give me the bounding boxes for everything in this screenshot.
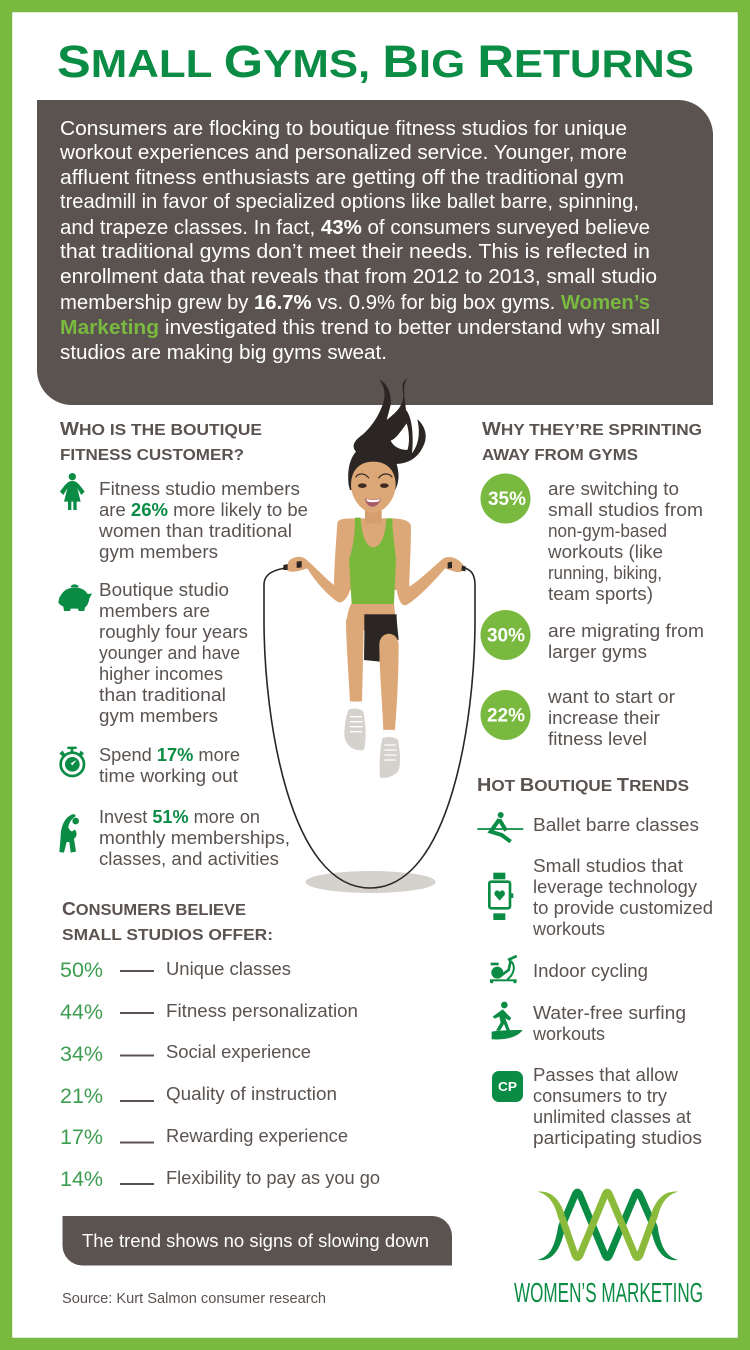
- trend: indoor cycling: [490, 956, 648, 983]
- hips: [347, 603, 397, 630]
- rope handles: [283, 561, 466, 571]
- banner: trend callout: The trend shows no signs of slowing down: [82, 1230, 429, 1251]
- heading: why they're sprinting away from gyms: [482, 419, 702, 464]
- trend: indoor cycling: Indoor cycling: [533, 960, 648, 981]
- stat: 22 percent: increase their: [548, 707, 660, 728]
- icon: smart watch: [489, 873, 513, 920]
- trend: class passes: [492, 1064, 702, 1148]
- trend: water-free surfing: workouts: [532, 1023, 605, 1044]
- list: what small studios offer: Fitness personalization: [166, 1000, 358, 1021]
- right leg: [379, 634, 399, 730]
- customer item: younger, higher incomes: Boutique studio: [99, 579, 229, 600]
- list: what small studios offer: 17%: [60, 1126, 103, 1149]
- panel: introduction: workout experiences and personalized service. Younger, more: [59, 142, 627, 164]
- icon: CP badge: [492, 1071, 523, 1102]
- icon: piggy bank: [58, 584, 92, 611]
- customer item: time working out: Spend 17% more: [99, 744, 240, 765]
- eyes and brows: [356, 474, 392, 478]
- icon: exercise bike: [490, 956, 517, 983]
- trend: water-free surfing: [492, 1002, 686, 1044]
- icon: ballet barre: [477, 812, 523, 842]
- trend: technology: leverage technology: [533, 876, 698, 897]
- customer item: invest more: monthly memberships,: [99, 827, 290, 848]
- icon: woman: [60, 473, 85, 510]
- icon: surfer: [492, 1002, 523, 1039]
- trend: technology: [489, 855, 713, 939]
- panel: introduction: Marketing investigated this trend to better understand why small: [60, 317, 660, 339]
- stat: 30 percent: larger gyms: [548, 641, 647, 662]
- panel: introduction: that traditional gyms don’t meet their needs. This is reflected in: [60, 241, 650, 263]
- stat: 22 percent: want to start or: [547, 686, 675, 707]
- customer item: younger, higher incomes: higher incomes: [99, 663, 223, 684]
- panel: introduction: affluent fitness enthusiasts are getting off the traditional gym: [60, 167, 624, 189]
- stat: 22 percent: fitness level: [548, 728, 647, 749]
- stat: 30 percent: are migrating from: [548, 620, 704, 641]
- stat: 35 percent: team sports): [548, 583, 653, 604]
- list: what small studios offer: Social experience: [166, 1041, 311, 1062]
- shadow: [306, 871, 436, 893]
- list: what small studios offer: 50%: [60, 959, 103, 982]
- heading: who is the boutique fitness customer: FITNESS CUSTOMER?: [60, 447, 244, 464]
- heading: who is the boutique fitness customer: WHO IS THE BOUTIQUE: [60, 419, 262, 439]
- icon: stretching person: [59, 814, 79, 853]
- list: what small studios offer: Flexibility to pay as you go: [166, 1167, 380, 1188]
- customer item: women: women than traditional: [98, 520, 292, 541]
- heading: consumers believe small studios offer: [62, 899, 273, 944]
- trend: water-free surfing: Water-free surfing: [533, 1002, 686, 1023]
- trend: technology: Small studios that: [533, 855, 683, 876]
- panel: introduction: Consumers are flocking to boutique fitness studios for unique: [60, 118, 627, 140]
- stat: 35 percent: [480, 474, 703, 604]
- hair: [348, 378, 426, 490]
- heading: consumers believe small studios offer: CONSUMERS BELIEVE: [62, 899, 246, 919]
- customer item: women: [60, 473, 308, 562]
- customer item: women: are 26% more likely to be: [99, 499, 308, 520]
- stat: 35 percent: are switching to: [548, 478, 679, 499]
- panel: introduction: and trapeze classes. In fact, 43% of consumers surveyed believe: [60, 217, 650, 239]
- trend: class passes: consumers to try: [533, 1085, 668, 1106]
- banner: trend callout: [62, 1216, 452, 1266]
- list: what small studios offer: 14%: [60, 1168, 103, 1191]
- right sock and shoe: [383, 730, 396, 740]
- customer item: younger, higher incomes: roughly four years: [99, 621, 248, 642]
- customer item: younger, higher incomes: members are: [99, 600, 210, 621]
- heading: why they're sprinting away from gyms: WHY THEY’RE SPRINTING: [482, 419, 702, 439]
- icon: CP badge: CP: [498, 1079, 517, 1094]
- neck: [365, 503, 382, 523]
- left leg: [346, 619, 364, 702]
- customer item: time working out: [59, 744, 240, 786]
- customer item: invest more: classes, and activities: [99, 848, 279, 869]
- list: what small studios offer: 44%: [60, 1001, 103, 1024]
- stat: 35 percent: running, biking,: [548, 562, 662, 583]
- customer item: time working out: time working out: [99, 765, 238, 786]
- stat: 35 percent: non-gym-based: [548, 520, 667, 541]
- list: what small studios offer: [60, 958, 380, 1191]
- list: what small studios offer: Unique classes: [166, 958, 291, 979]
- stat: 35 percent: 35%: [488, 489, 526, 510]
- trend: technology: workouts: [532, 918, 605, 939]
- icon: stopwatch: [59, 747, 84, 776]
- source: Source: Kurt Salmon consumer research: [62, 1291, 326, 1307]
- left sock and shoe: [349, 702, 362, 712]
- skipping rope: [264, 568, 475, 888]
- list: what small studios offer: Rewarding experience: [166, 1125, 348, 1146]
- stat: 35 percent: workouts (like: [547, 541, 663, 562]
- customer item: younger, higher incomes: gym members: [99, 705, 218, 726]
- trend: class passes: Passes that allow: [533, 1064, 679, 1085]
- logo: Women's Marketing: [514, 1191, 703, 1308]
- stat: 30 percent: 30%: [487, 626, 525, 646]
- heading: hot boutique trends: HOT BOUTIQUE TRENDS: [477, 775, 689, 795]
- customer item: invest more: [59, 806, 290, 869]
- title: SMALL GYMS, BIG RETURNS: [57, 36, 694, 87]
- customer item: younger, higher incomes: younger and have: [99, 642, 240, 663]
- arms and torso skin: [287, 518, 463, 605]
- customer item: invest more: Invest 51% more on: [99, 806, 260, 827]
- trend: technology: to provide customized: [533, 897, 713, 918]
- customer item: younger, higher incomes: than traditional: [99, 684, 226, 705]
- stat: 35 percent: small studios from: [548, 499, 703, 520]
- trend: ballet barre: [477, 812, 699, 842]
- trend: class passes: participating studios: [533, 1127, 702, 1148]
- stat: 22 percent: 22%: [487, 706, 525, 726]
- list: what small studios offer: 34%: [60, 1043, 103, 1066]
- illustration: woman skipping rope: [264, 378, 475, 893]
- customer item: women: Fitness studio members: [99, 478, 300, 499]
- panel: introduction: treadmill in favor of specialized options like ballet barre, spinning,: [60, 191, 639, 213]
- customer item: younger, higher incomes: [58, 579, 248, 726]
- trend: ballet barre: Ballet barre classes: [533, 814, 699, 835]
- shorts top: [364, 614, 397, 631]
- stat: 22 percent: [480, 686, 675, 749]
- heading: why they're sprinting away from gyms: AWAY FROM GYMS: [482, 447, 638, 464]
- heading: consumers believe small studios offer: SMALL STUDIOS OFFER:: [62, 927, 273, 944]
- panel: introduction: [37, 100, 713, 405]
- customer item: women: gym members: [99, 541, 218, 562]
- stat: 30 percent: [480, 610, 704, 662]
- panel: introduction: enrollment data that reveals that from 2012 to 2013, small studio: [60, 266, 657, 288]
- face: [351, 462, 396, 513]
- list: what small studios offer: 21%: [60, 1085, 103, 1108]
- panel: introduction: membership grew by 16.7% vs. 0.9% for big box gyms. Women’s: [60, 292, 650, 314]
- tank top: [349, 518, 396, 604]
- trend: class passes: unlimited classes at: [533, 1106, 691, 1127]
- shorts: [364, 619, 399, 662]
- panel: introduction: studios are making big gyms sweat.: [60, 342, 387, 364]
- mouth: [365, 498, 381, 507]
- list: what small studios offer: Quality of instruction: [166, 1083, 337, 1104]
- heading: who is the boutique fitness customer: [60, 419, 262, 464]
